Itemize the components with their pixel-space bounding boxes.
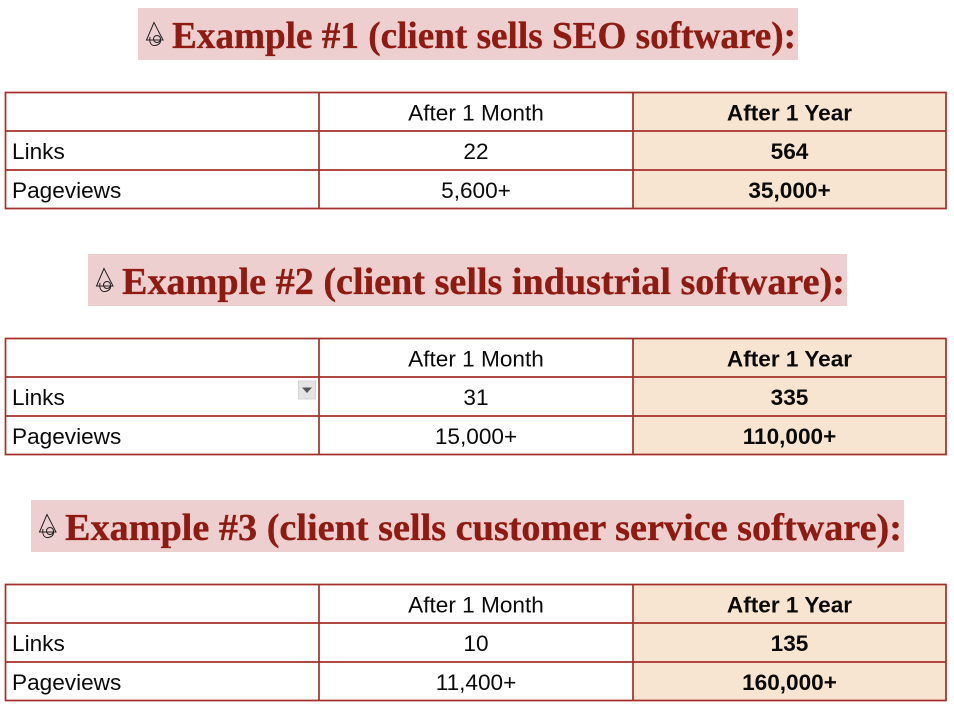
table: example 1: After 1 Year — [727, 100, 852, 126]
table: example 2: After 1 Month — [408, 346, 544, 372]
icon: triangle logo 2 — [96, 268, 113, 292]
table: example 2: 31 — [463, 385, 489, 410]
heading: example 2: Example #2 (client sells industrial software): — [122, 261, 845, 303]
table: example 1: 5,600+ — [441, 178, 511, 203]
table: example 3: 135 — [771, 631, 808, 656]
heading: example 1: Example #1 (client sells SEO software): — [172, 15, 796, 57]
table: example 2: 15,000+ — [435, 424, 517, 449]
icon: triangle logo 3 — [40, 514, 56, 538]
table: example 2: Links — [12, 385, 65, 410]
table: example 2: After 1 Year — [727, 346, 852, 372]
heading: example 3: Example #3 (client sells customer service software): — [65, 507, 902, 549]
table: example 3: Pageviews — [12, 670, 121, 695]
table: example 2: 110,000+ — [743, 424, 836, 449]
table: example 1: After 1 Month — [408, 100, 544, 126]
table: example 3: 11,400+ — [436, 670, 516, 695]
table: example 3: 10 — [463, 631, 489, 656]
table: example 3: Links — [12, 631, 65, 656]
table: example 1: 22 — [463, 139, 489, 164]
table: example 2: Pageviews — [12, 424, 121, 449]
table: example 3 — [6, 584, 946, 700]
table: example 1: 564 — [771, 139, 809, 164]
icon: dropdown button — [298, 381, 316, 399]
table: example 1: 35,000+ — [748, 178, 831, 203]
icon: triangle logo 1 — [146, 22, 163, 46]
table: example 1 — [6, 92, 946, 208]
table: example 3: After 1 Month — [408, 592, 544, 618]
table: example 3: After 1 Year — [727, 592, 852, 618]
table: example 3: 160,000+ — [742, 670, 837, 695]
table: example 2 — [6, 338, 946, 454]
table: example 2: 335 — [771, 385, 808, 410]
table: example 1: Pageviews — [12, 178, 121, 203]
table: example 1: Links — [12, 139, 65, 164]
